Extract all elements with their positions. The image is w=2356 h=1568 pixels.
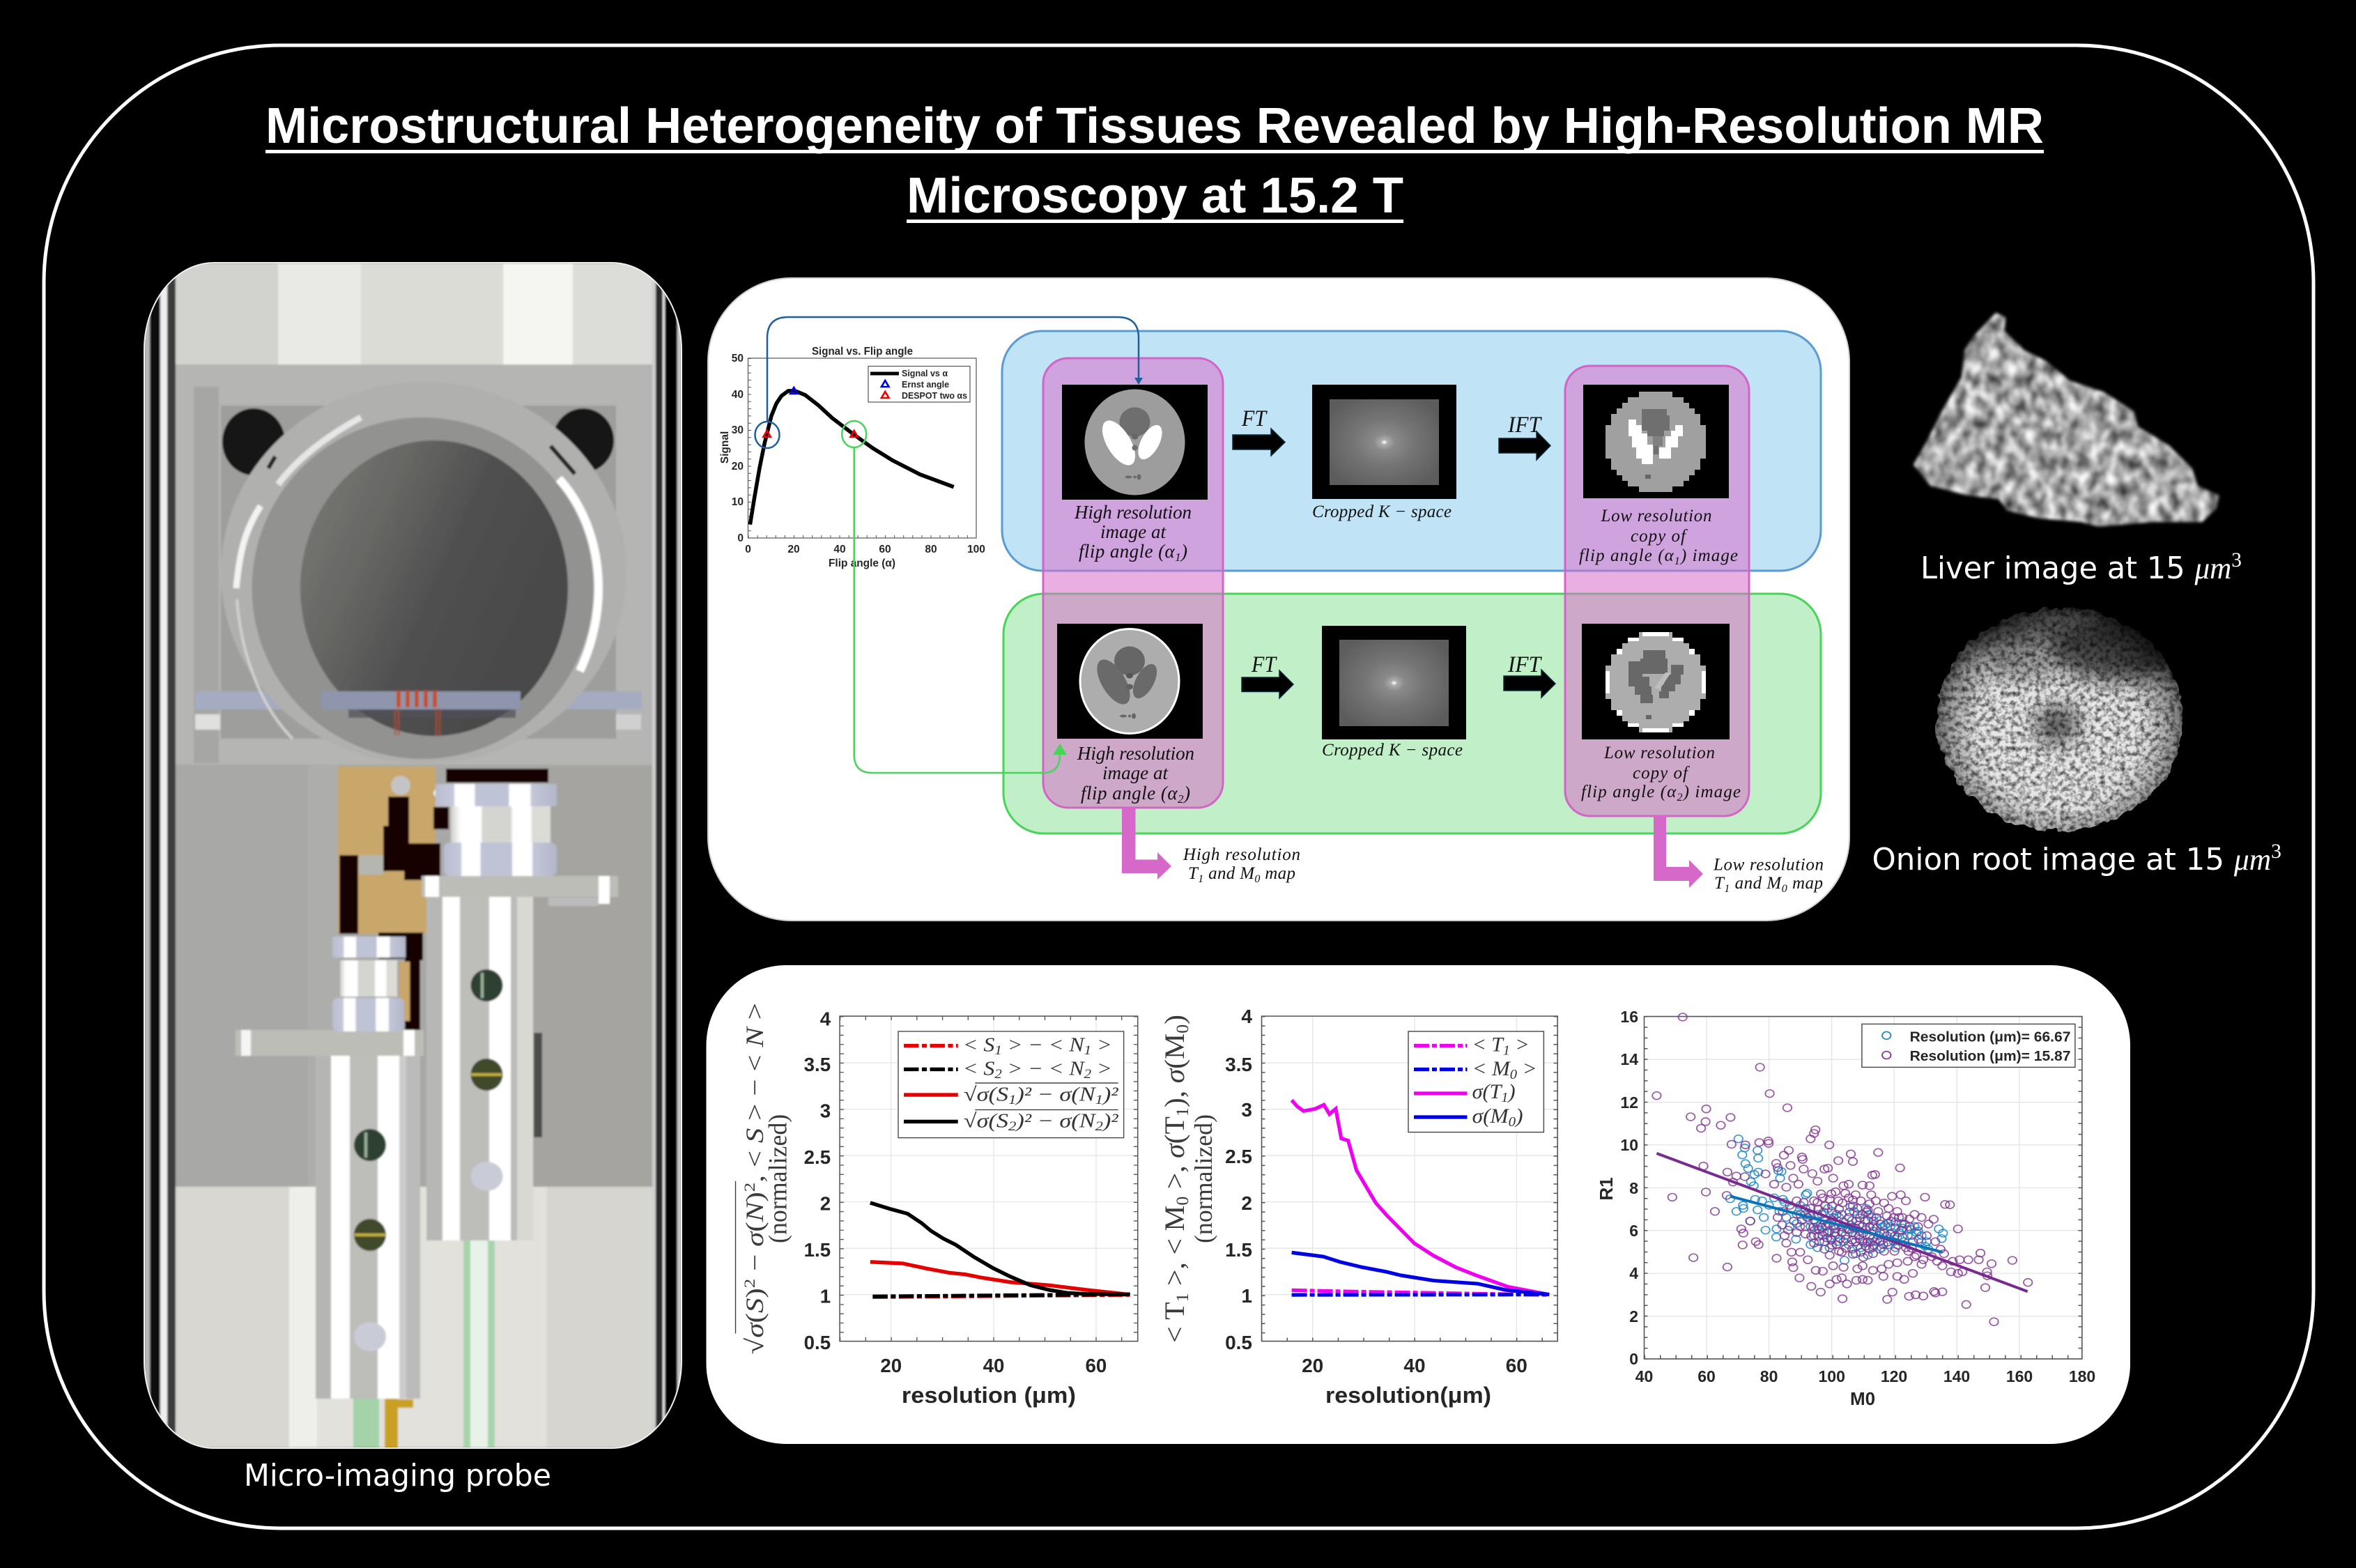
legend: signal and noise: 2 [1084, 1067, 1091, 1082]
chart: signal vs flip angle: 20 [787, 544, 800, 555]
chart: signal and noise versus resolution: , < [741, 1143, 769, 1183]
chart: signal vs flip angle: 60 [879, 544, 891, 555]
legend: T1 and M0: ) [1514, 1105, 1523, 1128]
label: onion root image: 3 [2271, 840, 2281, 863]
chart: signal and noise versus resolution: resolution (μm) [902, 1383, 1076, 1408]
chart: R1 versus M0 scatter: 0 [1629, 1350, 1638, 1368]
image: low resolution phantom alpha 1 [1583, 385, 1729, 498]
panel: signal flow pipeline [708, 278, 1849, 921]
legend: signal and noise: √σ(S [964, 1110, 1001, 1132]
title: Microscopy at 15.2 T [907, 168, 1403, 224]
legend: T1 and M0: > [1517, 1057, 1537, 1080]
chart: R1 versus M0 scatter: 6 [1629, 1222, 1638, 1240]
chart: T1 and M0 versus resolution: 3.5 [1225, 1054, 1252, 1075]
chart: signal and noise versus resolution: 2 [741, 1279, 758, 1288]
chart: T1 and M0 versus resolution: >, < M [1159, 1206, 1190, 1293]
text: pipeline captions: and M [1204, 864, 1255, 883]
text: pipeline captions: 0 [1254, 873, 1260, 885]
chart: signal and noise versus resolution: 60 [1086, 1355, 1107, 1376]
chart: signal and noise versus resolution: S > − < N > [741, 1007, 769, 1143]
chart: signal and noise versus resolution: 1.5 [804, 1239, 831, 1261]
chart: T1 and M0 versus resolution: 1 [1173, 1107, 1192, 1116]
text: pipeline captions: T [1188, 864, 1198, 883]
arrow: IFT alpha 1 [1499, 431, 1550, 460]
text: pipeline captions [1074, 406, 1824, 895]
chart: T1 and M0 versus resolution: σ(T [1159, 1118, 1190, 1158]
legend: signal and noise: √σ(S [964, 1084, 1001, 1106]
text: pipeline captions: IFT [1507, 652, 1543, 677]
blue row background [1002, 331, 1821, 571]
chart: signal vs flip angle: 0 [745, 544, 751, 555]
chart: R1 versus M0 scatter [1596, 1008, 2095, 1409]
chart: T1 and M0 versus resolution: 1 [1173, 1293, 1192, 1302]
text: pipeline captions: Low resolution [1713, 856, 1824, 874]
legend: T1 and M0 [1408, 1031, 1543, 1132]
text: pipeline captions: Low resolution [1603, 744, 1715, 762]
legend: signal and noise: )² [1101, 1110, 1118, 1132]
chart: T1 and M0 versus resolution: (normalized) [1189, 1114, 1217, 1243]
chart: signal and noise versus resolution: 2 [741, 1183, 758, 1192]
chart: signal and noise versus resolution: 4 [820, 1008, 831, 1030]
chart: R1 versus M0 scatter: Resolution (μm)= 15.87 [1910, 1049, 2070, 1064]
text: pipeline captions: flip angle (α [1079, 541, 1175, 562]
chart: T1 and M0 versus resolution: 20 [1302, 1355, 1323, 1376]
legend: signal and noise: 1 [1008, 1093, 1016, 1107]
arrow: high resolution output [1122, 808, 1171, 879]
chart: signal vs flip angle: 100 [967, 544, 985, 555]
chart: signal vs flip angle: 40 [833, 544, 846, 555]
text: pipeline captions: High resolution [1074, 502, 1192, 523]
chart: signal and noise versus resolution: 0.5 [804, 1332, 831, 1353]
image: high resolution phantom alpha 1 [1062, 385, 1208, 500]
chart: T1 and M0 versus resolution: 3 [1241, 1099, 1252, 1121]
legend: T1 and M0: σ(T [1472, 1080, 1501, 1103]
legend: signal and noise [898, 1031, 1124, 1138]
chart: T1 and M0 versus resolution: 2.5 [1225, 1146, 1252, 1167]
chart: R1 versus M0 scatter: Resolution (μm)= 66.67 [1910, 1030, 2070, 1045]
legend: T1 and M0: 0 [1510, 1067, 1517, 1082]
legend: signal and noise: 1 [1084, 1043, 1091, 1058]
legend: T1 and M0: < T [1472, 1033, 1503, 1056]
image: onion root MR slice [1924, 595, 2196, 843]
legend: signal and noise: > [1091, 1058, 1112, 1079]
chart: T1 and M0 versus resolution [1159, 1006, 1557, 1408]
text: pipeline captions: 2 [1677, 792, 1682, 804]
legend: T1 and M0: 1 [1503, 1043, 1510, 1059]
chart: R1 versus M0 scatter: 16 [1620, 1008, 1638, 1026]
text: pipeline captions: ) image [1682, 783, 1741, 801]
high resolution column [1043, 358, 1223, 808]
chart: R1 versus M0 scatter: 8 [1629, 1179, 1638, 1197]
text: pipeline captions: 1 [1724, 883, 1730, 895]
text: pipeline captions: image at [1102, 762, 1169, 783]
chart: signal vs flip angle: Flip angle (α) [829, 558, 895, 569]
text: pipeline captions: T [1714, 874, 1724, 893]
legend: T1 and M0: σ(M [1472, 1105, 1507, 1128]
chart: signal vs flip angle: 80 [925, 544, 937, 555]
chart: signal vs flip angle: Signal vs α [902, 369, 948, 378]
panel: quantitative charts [707, 965, 2130, 1444]
arrow: alpha 1 connector [767, 317, 1143, 422]
chart: R1 versus M0 scatter: 80 [1760, 1367, 1778, 1385]
legend: signal and noise: 2 [1008, 1119, 1016, 1134]
chart: T1 and M0 versus resolution: 2 [1241, 1192, 1252, 1214]
legend: signal and noise: )² [1101, 1084, 1118, 1106]
text: pipeline captions: ) [1183, 783, 1190, 804]
text: pipeline captions: 1 [1674, 555, 1680, 567]
chart: signal vs flip angle: DESPOT two αs [902, 391, 967, 401]
arrow: IFT alpha 2 [1504, 670, 1555, 698]
chart: T1 and M0 versus resolution: < T [1159, 1304, 1190, 1343]
image: cropped k-space alpha 2 [1322, 626, 1466, 739]
label: liver image: 3 [2231, 548, 2242, 571]
chart: signal and noise versus resolution: 1 [820, 1286, 831, 1307]
text: pipeline captions: FT [1251, 652, 1277, 677]
text: pipeline captions: and M [1730, 874, 1782, 893]
text: pipeline captions: 1 [1175, 551, 1181, 564]
legend: signal and noise: > − < N [1002, 1058, 1086, 1079]
chart: R1 versus M0 scatter: 100 [1819, 1367, 1845, 1385]
panel: micro-imaging probe render [144, 263, 682, 1448]
text: pipeline captions: Cropped K − space [1322, 741, 1463, 760]
green row background [1003, 594, 1821, 833]
label: onion root image: Onion root image at 15 μm [1872, 842, 2272, 877]
chart: R1 versus M0 scatter: 40 [1635, 1367, 1653, 1385]
text: pipeline captions: 1 [1198, 873, 1203, 885]
chart: signal and noise versus resolution: 2 [820, 1193, 831, 1215]
image: cropped k-space alpha 1 [1312, 385, 1456, 499]
text: pipeline captions: ) image [1679, 546, 1738, 565]
chart: signal vs flip angle [719, 346, 985, 569]
text: pipeline captions: FT [1241, 406, 1268, 431]
chart: T1 and M0 versus resolution: 0 [1173, 1024, 1192, 1033]
chart: signal and noise versus resolution: √σ(S) [741, 1290, 769, 1354]
text: pipeline captions: 2 [1178, 792, 1184, 806]
chart: R1 versus M0 scatter: 14 [1620, 1050, 1638, 1068]
chart: R1 versus M0 scatter: 60 [1697, 1367, 1716, 1385]
arrow: alpha 2 connector [854, 447, 1067, 773]
legend: T1 and M0: ) [1507, 1080, 1516, 1103]
chart: signal and noise versus resolution: 3.5 [804, 1054, 831, 1075]
chart: signal and noise versus resolution [736, 1003, 1138, 1408]
text: pipeline captions: High resolution [1077, 743, 1194, 764]
arrow: low resolution output [1654, 816, 1703, 888]
chart: signal and noise versus resolution: − [741, 1247, 769, 1279]
image: low resolution phantom alpha 2 [1582, 624, 1730, 739]
chart: T1 and M0 versus resolution: 4 [1241, 1006, 1252, 1027]
chart: signal and noise versus resolution: (normalized) [764, 1114, 792, 1243]
legend: T1 and M0: < M [1472, 1057, 1509, 1080]
chart: signal vs flip angle: 0 [737, 532, 744, 544]
chart: R1 versus M0 scatter: 120 [1881, 1367, 1907, 1385]
chart: R1 versus M0 scatter: 4 [1629, 1264, 1638, 1282]
text: pipeline captions: Low resolution [1600, 507, 1711, 525]
text: pipeline captions: map [1787, 874, 1823, 893]
legend: signal and noise: )² − σ(N [1015, 1084, 1097, 1106]
chart: signal vs flip angle: 10 [732, 496, 744, 508]
scatter: resolution 15.87 [1656, 1017, 2028, 1322]
text: pipeline captions: map [1261, 864, 1295, 883]
legend: signal and noise: )² − σ(N [1015, 1110, 1097, 1132]
text: pipeline captions: flip angle (α [1581, 783, 1676, 801]
chart: signal vs flip angle: 30 [732, 424, 744, 436]
chart: T1 and M0 versus resolution: 1.5 [1225, 1239, 1252, 1261]
text: pipeline captions: copy of [1633, 764, 1690, 783]
title: Microstructural Heterogeneity of Tissues Revealed by High-Resolution MR [265, 98, 2044, 154]
label: micro-imaging probe: Micro-imaging probe [244, 1458, 551, 1493]
chart: R1 versus M0 scatter: 180 [2069, 1367, 2095, 1385]
chart: signal and noise versus resolution: 3 [820, 1100, 831, 1122]
legend: signal and noise: 2 [1095, 1119, 1103, 1134]
chart: T1 and M0 versus resolution: 0 [1173, 1197, 1192, 1206]
legend: T1 and M0: 0 [1509, 1114, 1516, 1130]
legend: T1 and M0: > [1510, 1033, 1530, 1056]
chart: R1 versus M0 scatter: 12 [1620, 1093, 1638, 1112]
text: pipeline captions: 0 [1782, 883, 1787, 895]
legend: signal and noise: < S [963, 1058, 992, 1079]
chart: R1 versus M0 scatter: 2 [1629, 1307, 1638, 1325]
scatter: resolution 66.67 [1730, 1139, 1943, 1261]
chart: T1 and M0 versus resolution: 0.5 [1225, 1332, 1252, 1353]
legend: signal and noise: < S [963, 1035, 992, 1056]
chart: T1 and M0 versus resolution: resolution(μm) [1325, 1383, 1491, 1408]
text: pipeline captions: flip angle (α [1081, 783, 1178, 804]
arrow: FT alpha 2 [1242, 670, 1293, 698]
chart: R1 versus M0 scatter: M0 [1850, 1388, 1875, 1409]
legend: signal and noise: 1 [1095, 1093, 1103, 1107]
chart: signal and noise versus resolution: 40 [983, 1355, 1004, 1376]
text: pipeline captions: flip angle (α [1579, 546, 1674, 565]
chart: R1 versus M0 scatter: 160 [2006, 1367, 2033, 1385]
low resolution column [1565, 366, 1749, 816]
chart: signal and noise versus resolution: σ(N) [741, 1194, 769, 1247]
chart: T1 and M0 versus resolution: 40 [1403, 1355, 1426, 1376]
chart: T1 and M0 versus resolution: ) [1159, 1015, 1190, 1024]
chart: signal vs flip angle: 20 [732, 461, 744, 472]
chart: signal vs flip angle: Signal [719, 431, 731, 463]
legend: signal and noise: 1 [994, 1043, 1002, 1058]
chart: signal and noise versus resolution: 2.5 [804, 1146, 831, 1168]
text: pipeline captions: Cropped K − space [1312, 502, 1452, 521]
legend: signal and noise: > [1091, 1035, 1112, 1056]
arrow: FT alpha 1 [1233, 429, 1285, 456]
image: high resolution phantom alpha 2 [1057, 624, 1203, 739]
chart: signal vs flip angle: 50 [732, 353, 744, 364]
chart: signal vs flip angle: Signal vs. Flip angle [812, 346, 913, 358]
chart: signal vs flip angle: Ernst angle [902, 380, 949, 390]
chart: R1 versus M0 scatter: R1 [1596, 1177, 1617, 1201]
chart: signal vs flip angle: 40 [732, 389, 744, 401]
legend: signal and noise: > − < N [1002, 1035, 1086, 1056]
chart: T1 and M0 versus resolution: 60 [1506, 1355, 1527, 1376]
chart: T1 and M0 versus resolution: ), [1159, 1083, 1190, 1107]
text: pipeline captions: IFT [1507, 413, 1543, 438]
text: pipeline captions: ) [1180, 541, 1187, 562]
chart: T1 and M0 versus resolution: >, [1159, 1158, 1190, 1197]
title [265, 98, 2044, 224]
chart: R1 versus M0 scatter: 10 [1620, 1136, 1638, 1154]
label: liver image: Liver image at 15 μm [1920, 551, 2232, 586]
chart: T1 and M0 versus resolution: 1 [1241, 1285, 1252, 1307]
text: pipeline captions: High resolution [1183, 845, 1300, 864]
image: liver MR slice [1914, 313, 2219, 527]
text: pipeline captions: image at [1100, 521, 1167, 542]
chart: signal and noise versus resolution: 20 [880, 1355, 902, 1376]
legend: signal and noise: 2 [994, 1067, 1002, 1082]
legend: T1 and M0: 1 [1501, 1090, 1509, 1105]
chart: R1 versus M0 scatter: 140 [1943, 1367, 1970, 1385]
text: pipeline captions: copy of [1631, 527, 1688, 546]
chart: T1 and M0 versus resolution: σ(M [1159, 1035, 1190, 1083]
